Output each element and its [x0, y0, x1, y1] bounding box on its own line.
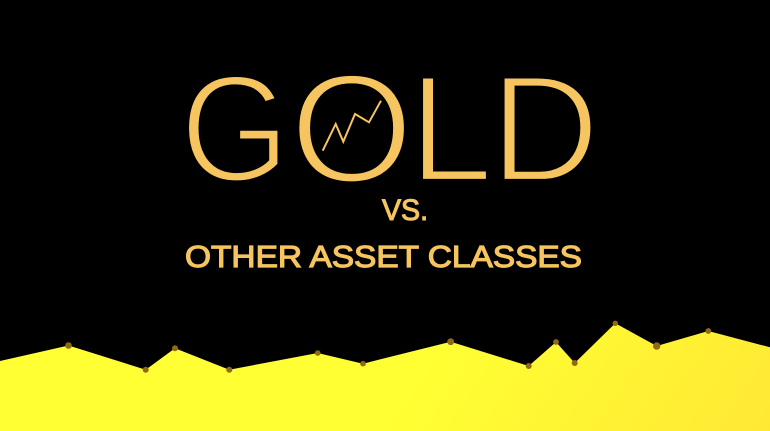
title: GOLD: O	[290, 43, 414, 216]
icon: rising chart line inside the O	[323, 101, 381, 151]
subtitle: VS.: VS.	[382, 194, 428, 227]
title: GOLD: G	[180, 44, 290, 214]
yellow area	[0, 323, 770, 431]
data points	[65, 321, 711, 373]
chart: yellow area with data points	[0, 321, 770, 431]
title: GOLD	[180, 43, 600, 216]
title: GOLD: LD	[408, 44, 600, 214]
subtitle: OTHER ASSET CLASSES: OTHER ASSET CLASSES	[185, 239, 582, 274]
